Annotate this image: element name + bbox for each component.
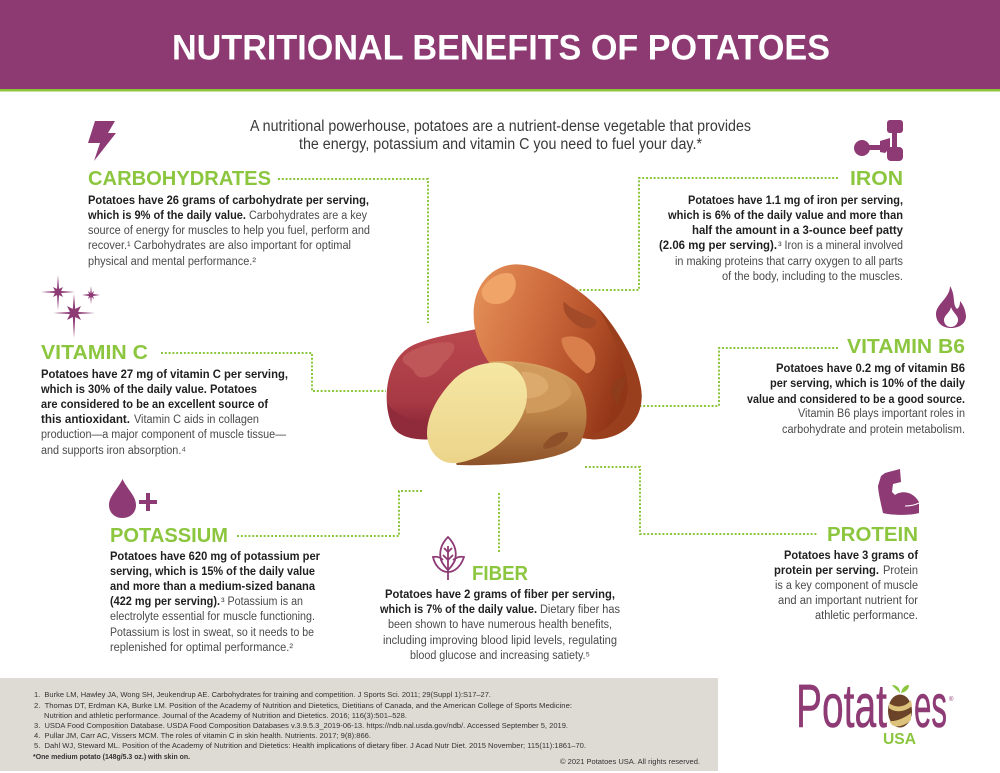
red potato: [387, 329, 520, 439]
body: vitamin B6: Potatoes have 0.2 mg of vitamin B6: [776, 363, 965, 375]
connector: vitamin C to potato: [161, 353, 386, 391]
body: potassium: serving, which is 15% of the daily value: [110, 566, 315, 578]
heading: vitamin C: VITAMIN C: [41, 341, 148, 364]
body: iron: (2.06 mg per serving).: [659, 240, 777, 252]
body: fiber: been shown to have numerous health benefits,: [388, 619, 612, 631]
heading: fiber: FIBER: [472, 562, 528, 585]
connector: fiber to potato: [498, 493, 500, 552]
logo: Potatoes USA: Potat: [796, 672, 887, 740]
body: potassium: and more than a medium-sized banana: [110, 581, 316, 593]
connector: protein to potato: [585, 467, 818, 534]
body: vitamin B6: per serving, which is 10% of the daily: [770, 378, 966, 390]
body: potassium: electrolyte essential for muscle functioning.: [110, 611, 315, 623]
reference list: 4. Pullar JM, Carr AC, Vissers MCM. The roles of vitamin C in skin health. Nutrients. 2017; 9(8):866.: [34, 731, 371, 740]
serving footnote: *One medium potato (148g/5.3 oz.) with skin on.: [33, 752, 190, 761]
panel: carbohydrates: [87, 121, 370, 268]
body: iron: in making proteins that carry oxygen to all parts: [675, 256, 903, 268]
body: potassium: Potatoes have 620 mg of potassium per: [110, 551, 320, 563]
body: iron: of the body, including to the muscles.: [722, 271, 903, 283]
intro text: [250, 118, 751, 153]
body: carbohydrates: Carbohydrates are a key: [249, 210, 367, 222]
heading: potassium: POTASSIUM: [110, 524, 228, 547]
body: iron: [659, 195, 904, 283]
body: vitamin B6: [747, 363, 966, 436]
body: vitamin C: are considered to be an excellent source of: [41, 399, 268, 411]
connector: vitamin B6 to potato: [640, 348, 838, 406]
body: protein: is a key component of muscle: [775, 580, 918, 592]
logo: Potatoes USA: es: [914, 672, 947, 740]
body: protein: athletic performance.: [815, 610, 918, 622]
icon: lightning bolt: [88, 121, 116, 161]
panel: potassium: [109, 479, 320, 654]
body: carbohydrates: recover.¹ Carbohydrates are also important for optimal: [88, 240, 351, 252]
intro text: A nutritional powerhouse, potatoes are a nutrient-dense vegetable that provides: [250, 118, 751, 135]
panel: vitamin C: [40, 275, 288, 457]
panel: references: [0, 678, 718, 771]
icon: flame: [936, 286, 966, 328]
connector: potassium to potato: [237, 491, 422, 536]
reference list: Nutrition and athletic performance. Journal of the Academy of Nutrition and Dietetics. 2016; 116(3):501–528.: [44, 711, 407, 720]
body: fiber: including improving blood lipid levels, regulating: [383, 635, 617, 647]
body: vitamin C: production—a major component of muscle tissue—: [41, 429, 286, 441]
icon: leaf sprout: [433, 537, 464, 580]
body: iron: which is 6% of the daily value and more than: [667, 210, 903, 222]
body: vitamin C: [40, 369, 288, 457]
heading: vitamin B6: VITAMIN B6: [847, 335, 965, 358]
heading: carbohydrates: CARBOHYDRATES: [88, 167, 271, 190]
reference list: 1. Burke LM, Hawley JA, Wong SH, Jeukendrup AE. Carbohydrates for training and competition. J Sports Sci. 2011; 29(Suppl 1):S17–27.: [34, 690, 491, 699]
icon: flexed bicep: [878, 469, 919, 515]
reference list: [34, 690, 586, 750]
body: potassium: Potassium is lost in sweat, so it needs to be: [110, 627, 314, 639]
body: protein: and an important nutrient for: [778, 595, 918, 607]
body: vitamin C: Potatoes have 27 mg of vitamin C per serving,: [41, 369, 288, 381]
reference list: 2. Thomas DT, Erdman KA, Burke LM. Position of the Academy of Nutrition and Dietetics, Dietitians of Canada, and the American College of Sports Medicine:: [34, 701, 572, 710]
body: vitamin C: and supports iron absorption.⁴: [41, 445, 186, 457]
body: iron: Potatoes have 1.1 mg of iron per serving,: [688, 195, 903, 207]
panel: iron: [659, 120, 904, 283]
body: protein: protein per serving.: [774, 565, 879, 577]
body: protein: Potatoes have 3 grams of: [784, 550, 918, 562]
body: vitamin B6: value and considered to be a good source.: [747, 394, 965, 406]
logo: Potatoes USA: USA: [883, 731, 916, 748]
cut potato face: [427, 363, 527, 463]
body: carbohydrates: which is 9% of the daily value.: [87, 210, 246, 222]
body: vitamin B6: Vitamin B6 plays important roles in: [798, 408, 965, 420]
body: potassium: (422 mg per serving).: [110, 596, 220, 608]
panel: protein: [774, 469, 919, 622]
reference list: 3. USDA Food Composition Database. USDA Food Composition Databases v.3.9.5.3_2019-06-13. https://ndb.nal.usda.gov/ndb/. Accessed September 5, 2019.: [34, 721, 568, 730]
body: iron: half the amount in a 3-ounce beef patty: [692, 225, 904, 237]
body: potassium: ³ Potassium is an: [221, 596, 303, 608]
body: protein: Protein: [883, 565, 918, 577]
panel: fiber: [379, 537, 620, 662]
body: fiber: Dietary fiber has: [540, 604, 620, 616]
body: carbohydrates: source of energy for muscles to help you fuel, perform and: [88, 225, 370, 237]
body: fiber: blood glucose and increasing satiety.⁵: [410, 650, 590, 662]
body: vitamin C: which is 30% of the daily value. Potatoes: [40, 384, 257, 396]
orange potato: [474, 264, 642, 439]
body: iron: ³ Iron is a mineral involved: [778, 240, 903, 252]
logo: Potatoes USA: ®: [949, 696, 954, 703]
icon: drop with plus: [109, 479, 157, 518]
reference list: 5. Dahl WJ, Steward ML. Position of the Academy of Nutrition and Dietetics: Health implications of dietary fiber. J Acad Nutr Diet. 2015 November; 115(11):1861–70.: [34, 741, 586, 750]
body: carbohydrates: [87, 195, 370, 268]
cut potato body: [447, 361, 587, 465]
icon: dumbbell: [854, 120, 903, 161]
body: fiber: Potatoes have 2 grams of fiber per serving,: [385, 589, 615, 601]
heading: iron: IRON: [850, 167, 903, 190]
connector: iron to potato: [577, 178, 838, 290]
title: NUTRITIONAL BENEFITS OF POTATOES: [172, 28, 830, 68]
body: potassium: [110, 551, 320, 654]
logo potato mark: [888, 685, 912, 728]
header banner: [0, 0, 1000, 92]
body: fiber: which is 7% of the daily value.: [379, 604, 537, 616]
panel: vitamin B6: [747, 286, 966, 436]
body: carbohydrates: physical and mental performance.²: [88, 256, 256, 268]
intro text: the energy, potassium and vitamin C you need to fuel your day.*: [299, 136, 702, 153]
body: potassium: replenished for optimal performance.²: [110, 642, 293, 654]
heading: protein: PROTEIN: [827, 523, 918, 546]
body: vitamin C: Vitamin C aids in collagen: [134, 414, 259, 426]
connector: carbohydrates to potato: [278, 179, 428, 323]
body: vitamin B6: carbohydrate and protein metabolism.: [782, 424, 965, 436]
body: carbohydrates: Potatoes have 26 grams of carbohydrate per serving,: [88, 195, 369, 207]
copyright: © 2021 Potatoes USA. All rights reserved.: [560, 757, 700, 766]
icon: sparkles: [41, 275, 100, 338]
potato illustration: [387, 264, 642, 465]
body: protein: [774, 550, 918, 622]
body: vitamin C: this antioxidant.: [41, 414, 130, 426]
body: fiber: [379, 589, 620, 662]
